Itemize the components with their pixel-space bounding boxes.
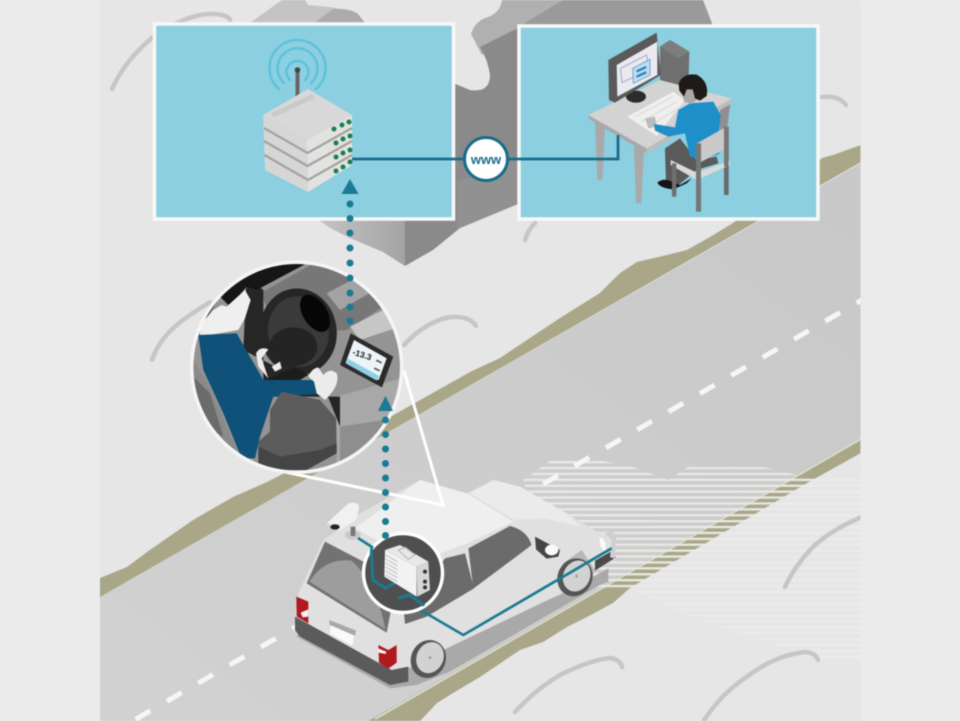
shirt <box>654 102 721 159</box>
mountain <box>247 0 713 266</box>
card background <box>154 24 454 219</box>
driver face <box>200 290 251 337</box>
car shadow <box>297 568 608 688</box>
driver seat <box>258 391 337 457</box>
car body <box>295 480 617 678</box>
card background <box>519 26 818 219</box>
road edge line <box>375 439 861 719</box>
car <box>295 480 617 688</box>
inset: data logger <box>364 534 442 618</box>
headlight beam on verge <box>630 479 861 660</box>
desk top <box>588 115 647 153</box>
illustration scene <box>100 0 862 721</box>
antenna <box>295 67 300 98</box>
www label: www <box>470 152 502 167</box>
logger box <box>384 545 430 597</box>
icon: antenna signal <box>270 40 326 89</box>
dashboard band <box>263 264 381 331</box>
front bumper <box>595 531 617 571</box>
right tail light <box>378 645 397 669</box>
rear window <box>307 542 392 633</box>
inset disc <box>364 534 442 612</box>
monitor stand <box>626 91 646 103</box>
dotted arrow: vehicle to tablet <box>378 396 393 539</box>
main wire along the side <box>403 548 612 635</box>
server stack <box>263 89 352 192</box>
dash tablet <box>340 333 393 387</box>
driver hair <box>206 263 305 319</box>
upper grass verge <box>100 145 861 597</box>
roof camera <box>327 503 361 540</box>
driver right hand <box>308 367 337 400</box>
trousers <box>665 138 718 187</box>
rear wheel <box>404 634 452 684</box>
headlight beam on road <box>523 461 815 590</box>
shoes <box>657 178 692 189</box>
centre line dashes <box>136 300 862 719</box>
rear bumper <box>295 617 408 685</box>
monitor <box>608 33 661 103</box>
steering column <box>243 277 340 427</box>
head <box>682 88 697 104</box>
connection line: server to workstation <box>352 135 618 159</box>
ground squiggles <box>112 14 862 721</box>
chair back legs <box>724 127 729 195</box>
inset ring <box>192 262 402 472</box>
car hood <box>470 480 582 527</box>
wires in inset <box>369 551 426 608</box>
car roof <box>355 480 513 555</box>
steering wheel <box>259 288 338 375</box>
card: office worker <box>519 26 818 219</box>
card: server <box>154 24 454 219</box>
hair <box>679 74 707 101</box>
cab scene <box>190 260 407 475</box>
front wheel <box>551 550 599 602</box>
rear window reflection <box>309 560 385 629</box>
dotted arrow: tablet to server <box>342 179 358 324</box>
camera wire <box>358 538 372 552</box>
chair <box>671 160 730 180</box>
lower grass verge <box>368 438 861 721</box>
driver left hand <box>256 348 282 378</box>
desk legs <box>595 122 605 180</box>
rear side window <box>404 553 474 624</box>
road surface <box>100 163 861 721</box>
front side window <box>468 526 532 589</box>
left tail light <box>296 597 308 623</box>
license plate <box>329 620 356 646</box>
tower <box>660 40 689 90</box>
inset: driver in cab <box>190 260 407 475</box>
ground <box>100 0 861 721</box>
keyboard papers <box>627 92 685 136</box>
wing mirror <box>535 537 560 559</box>
www badge <box>464 138 508 180</box>
zoom pointer lines <box>285 371 443 505</box>
tablet reading: -13.3 <box>351 347 373 362</box>
driver torso <box>198 333 318 458</box>
workstation illustration <box>588 33 732 212</box>
